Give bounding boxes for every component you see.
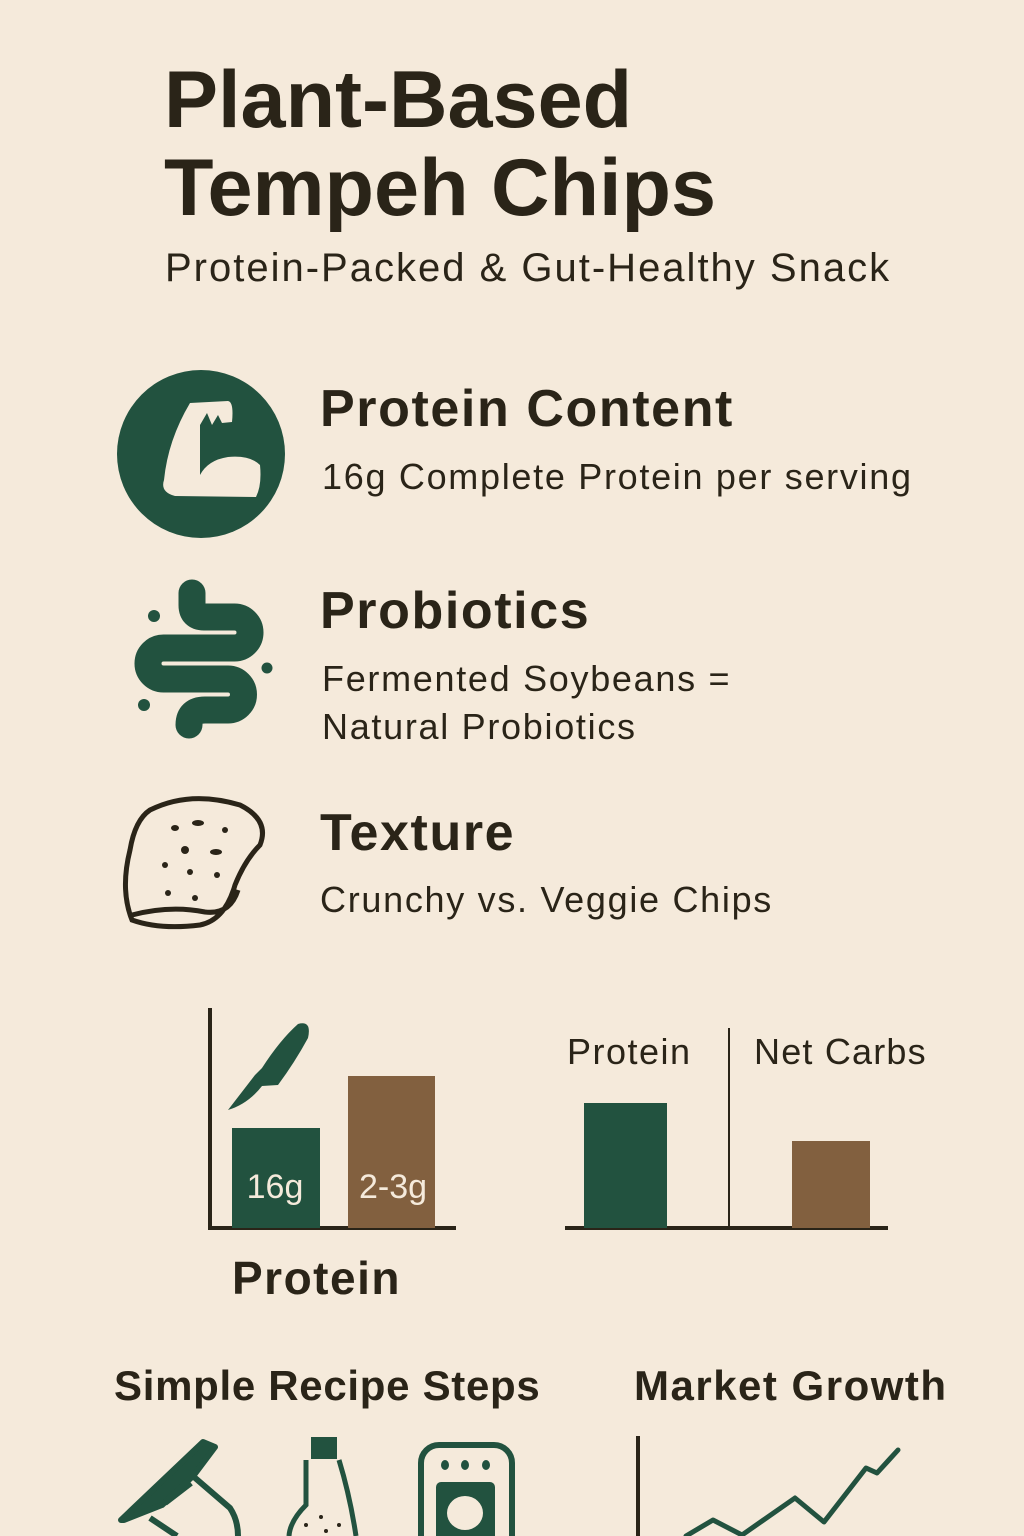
title: Tempeh Chips [164,143,716,233]
chart: protein comparison: 16g [247,1168,303,1206]
chart: protein vs net carbs: Protein [567,1031,692,1072]
text: probiotics [322,658,731,747]
chart: protein vs net carbs [565,1028,927,1230]
heading: texture: Texture [320,804,515,862]
subtitle: Protein-Packed & Gut-Healthy Snack [165,246,891,290]
icons: recipe steps [118,1437,515,1536]
label: protein: Protein [232,1252,401,1304]
icon: intestine [134,580,272,738]
text: protein: 16g Complete Protein per serving [322,456,913,497]
text: texture: Crunchy vs. Veggie Chips [320,879,773,920]
icon: chip slice [122,796,266,930]
title [164,55,716,233]
chart: protein vs net carbs: Net Carbs [754,1031,927,1072]
icon: muscle [117,370,285,538]
heading: recipe steps: Simple Recipe Steps [114,1362,540,1409]
text: probiotics: Natural Probiotics [322,706,637,747]
heading: probiotics: Probiotics [320,582,590,640]
text: probiotics: Fermented Soybeans = [322,658,731,699]
chart: market growth line [636,1436,900,1536]
chart: protein comparison: 2-3g [359,1168,427,1206]
title: Plant-Based [164,55,632,145]
heading: market growth: Market Growth [634,1362,948,1409]
chart: protein comparison [208,1008,456,1230]
heading: protein content: Protein Content [320,380,734,438]
